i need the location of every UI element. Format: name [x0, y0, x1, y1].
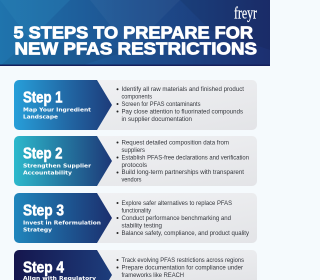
step 3 bullets: Balance safety, compliance, and product quality	[122, 230, 250, 237]
step 2 bullets: Establish PFAS-free declarations and verification	[122, 154, 249, 161]
step 1 subtitle: Map Your Ingredient	[23, 108, 91, 114]
panel: step 1	[14, 80, 257, 130]
step 3 subtitle: Invest in Reformulation	[23, 220, 101, 226]
step 2 subtitle: Strengthen Supplier	[23, 164, 91, 170]
step 2 heading: Step 2	[23, 146, 62, 162]
step 1 bullets: Screen for PFAS contaminants	[122, 101, 200, 108]
title: 5 STEPS TO PREPARE FOR	[14, 22, 253, 42]
step 4 arrow	[14, 250, 112, 280]
step 4 heading: Step 4	[23, 260, 64, 276]
logo: freyr: freyr	[234, 4, 257, 22]
step 3 bullets: Explore safer alternatives to replace PFAS	[122, 200, 232, 207]
step 1 bullets: Identify all raw materials and finished product	[122, 86, 244, 93]
step 2 bullets: Request detailed composition data from	[122, 140, 229, 147]
step 1 bullets: Pay close attention to fluorinated compounds	[122, 108, 243, 115]
step 3 bullets: stability testing	[122, 222, 162, 229]
step 3 subtitle: Strategy	[23, 228, 53, 234]
step 3 arrow	[14, 193, 112, 243]
step 4 bullets: frameworks like REACH	[122, 272, 184, 279]
header banner	[0, 0, 270, 66]
step 3 bullets: Conduct performance benchmarking and	[122, 215, 231, 222]
step 1 subtitle	[23, 108, 91, 120]
step 4 bullets: Prepare documentation for compliance under	[122, 265, 243, 272]
step 2 arrow	[14, 136, 112, 186]
panel: step 3	[14, 193, 257, 243]
step 2 bullets	[116, 140, 249, 184]
title	[14, 22, 257, 58]
step 1 heading: Step 1	[23, 90, 63, 106]
step 4 bullets: Track evolving PFAS restrictions across regions	[122, 257, 244, 264]
step 2 bullets: suppliers	[122, 147, 145, 154]
step 1 bullets: in supplier documentation	[122, 116, 192, 123]
step 4 bullets	[116, 257, 244, 279]
step 1 bullets	[116, 86, 244, 123]
step 2 bullets: Build long-term partnerships with transparent	[122, 169, 244, 176]
step 3 subtitle	[23, 220, 101, 234]
step 2 subtitle: Accountability	[23, 170, 73, 176]
step 1 subtitle: Landscape	[23, 114, 58, 120]
step 3 bullets: functionality	[122, 208, 152, 215]
panel: step 4	[14, 250, 257, 280]
panel: step 2	[14, 136, 257, 186]
step 2 bullets: vendors	[122, 177, 142, 184]
step 1 arrow	[14, 80, 112, 130]
title: NEW PFAS RESTRICTIONS	[14, 38, 257, 58]
step 3 heading: Step 3	[23, 202, 64, 220]
step 2 subtitle	[23, 164, 91, 176]
step 1 bullets: components	[122, 94, 152, 101]
step 3 bullets	[116, 200, 250, 237]
step 2 bullets: protocols	[122, 162, 147, 169]
